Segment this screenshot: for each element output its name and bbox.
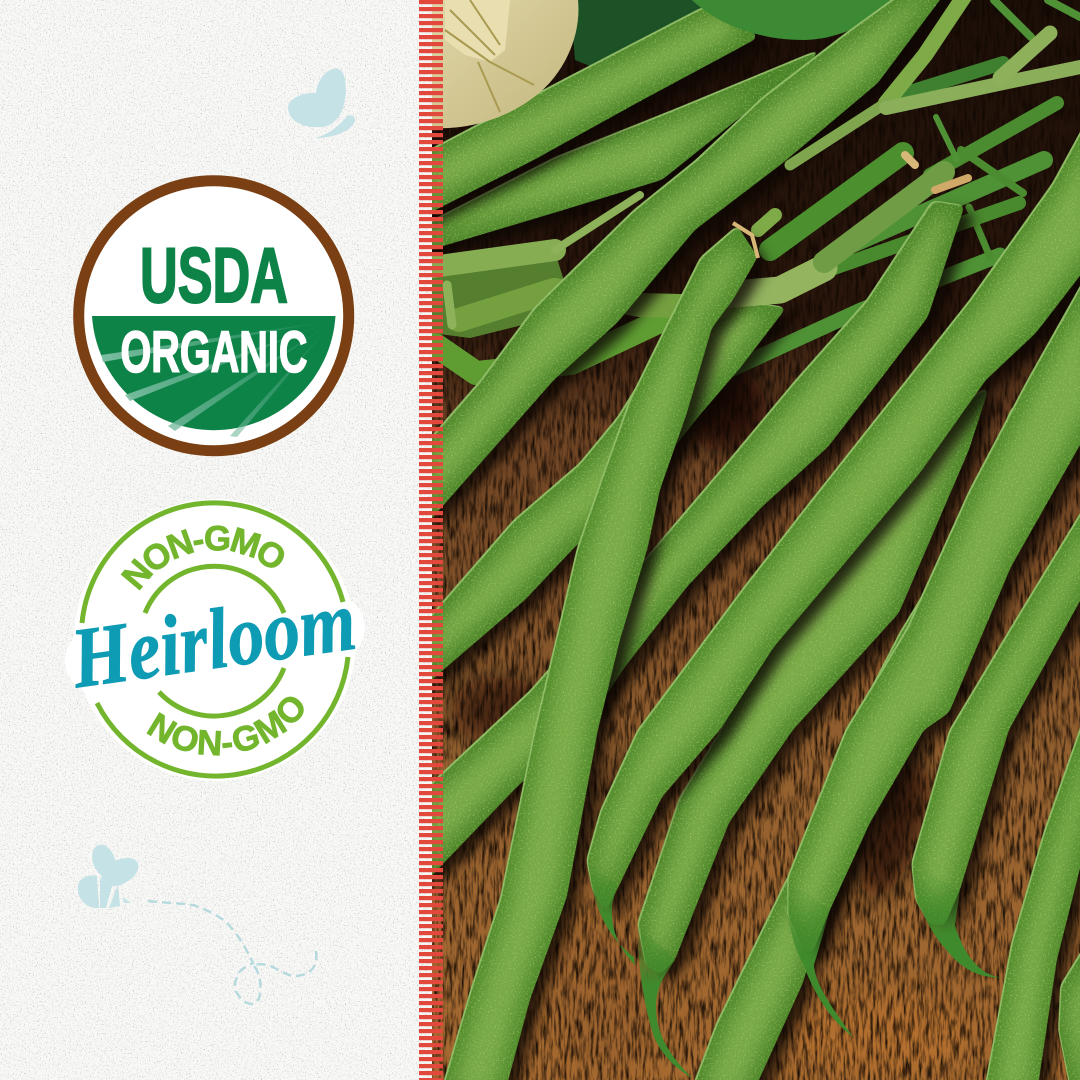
bean J — [911, 480, 1080, 925]
bean H front — [787, 250, 1080, 955]
bean L — [1058, 920, 1080, 1080]
leaf — [692, 0, 895, 40]
curved NON-GMO labels: NON-GMO — [137, 683, 320, 774]
bean E — [420, 200, 965, 888]
bean F — [586, 95, 1080, 912]
icon: bee — [78, 841, 143, 908]
bean A — [420, 0, 758, 218]
USDA text: USDA — [140, 231, 288, 319]
bean tail F — [588, 863, 635, 965]
bean lower centre — [687, 800, 860, 1080]
badge: Non-GMO Heirloom — [61, 499, 369, 781]
bean B — [420, 47, 824, 253]
bean C — [420, 0, 955, 532]
panel: green bean photograph — [420, 0, 1080, 1080]
dashed bee flight path — [148, 901, 316, 1004]
curved NON-GMO labels: NON-GMO — [109, 507, 297, 601]
badge: USDA Organic — [79, 181, 349, 451]
ORGANIC text: ORGANIC — [120, 320, 308, 385]
striped red divider — [419, 0, 443, 1080]
panel: linen background — [0, 0, 432, 1080]
brown ring — [79, 181, 349, 451]
bean V long vertical — [438, 225, 758, 1080]
curved NON-GMO labels — [109, 507, 322, 775]
top stems — [758, 0, 1080, 230]
bean K — [982, 670, 1080, 1080]
bean tail G — [637, 923, 692, 1078]
bean G — [637, 385, 990, 975]
sticker backing — [61, 499, 369, 781]
bean tip cut — [733, 223, 758, 258]
bean D — [420, 300, 787, 690]
Heirloom script: Heirloom — [65, 572, 361, 707]
bean H back — [849, 390, 1040, 730]
field rays — [101, 321, 331, 437]
bean tail J — [911, 863, 1003, 977]
onion — [432, 0, 578, 128]
green field — [92, 316, 336, 430]
background stems — [425, 0, 1080, 373]
wooden table — [432, 0, 1080, 1080]
icon: butterfly — [288, 69, 355, 138]
outer rings — [82, 503, 348, 776]
cut stems — [425, 117, 957, 335]
bean tail H — [787, 880, 853, 1037]
dark leaf shadow — [574, 0, 702, 66]
